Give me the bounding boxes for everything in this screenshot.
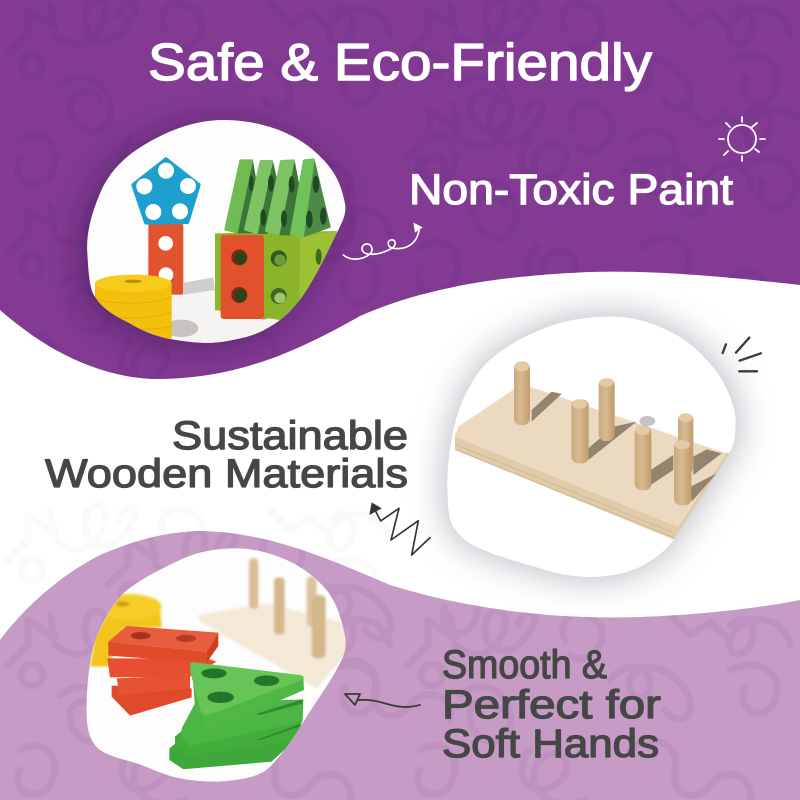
heading: Sustainable Wooden Materials	[45, 414, 408, 496]
photo: wooden pegboard in blob	[447, 317, 736, 577]
red stack	[107, 626, 218, 716]
heading: Smooth & Perfect for Soft Hands: Smooth &	[442, 643, 607, 687]
panel: faint pattern on white band	[8, 506, 390, 699]
peg shadows	[532, 392, 562, 422]
green triangles	[226, 160, 329, 236]
photo: painted toy shapes in blob	[87, 120, 346, 343]
arrow: zigzag	[369, 502, 430, 555]
pegs	[514, 362, 693, 505]
heading: Sustainable Wooden Materials: Wooden Materials	[45, 452, 408, 496]
panel: middle band shadow around wood photo	[443, 312, 741, 581]
heading: Smooth & Perfect for Soft Hands	[442, 643, 661, 766]
blurred yellow disc	[90, 594, 162, 667]
board top	[455, 384, 727, 527]
blue pentagon	[133, 159, 199, 223]
blurred wooden board	[198, 558, 347, 688]
board side	[455, 433, 733, 539]
floor tone	[92, 290, 307, 343]
heading: Smooth & Perfect for Soft Hands: Perfect for	[442, 683, 661, 727]
cast shadows	[184, 277, 215, 295]
panel: top purple wave	[0, 0, 800, 394]
heading: Smooth & Perfect for Soft Hands: Soft Hands	[442, 722, 659, 766]
lime blocks	[215, 231, 337, 320]
arrow: curved dark arrow	[345, 694, 420, 707]
heading: Sustainable Wooden Materials: Sustainable	[172, 414, 408, 458]
red front block	[221, 235, 264, 319]
arrow: looped white arrow	[343, 223, 423, 259]
icon: spark lines	[723, 338, 761, 371]
yellow discs	[95, 275, 172, 340]
red column	[148, 224, 183, 295]
title: Safe & Eco-Friendly	[148, 34, 652, 92]
icon: sun	[719, 117, 765, 161]
photo: smooth stacked blocks in blob	[87, 548, 347, 782]
panel: bottom lilac wave	[0, 531, 800, 800]
green stack	[169, 662, 304, 769]
heading: Non-Toxic Paint: Non-Toxic Paint	[409, 166, 733, 214]
